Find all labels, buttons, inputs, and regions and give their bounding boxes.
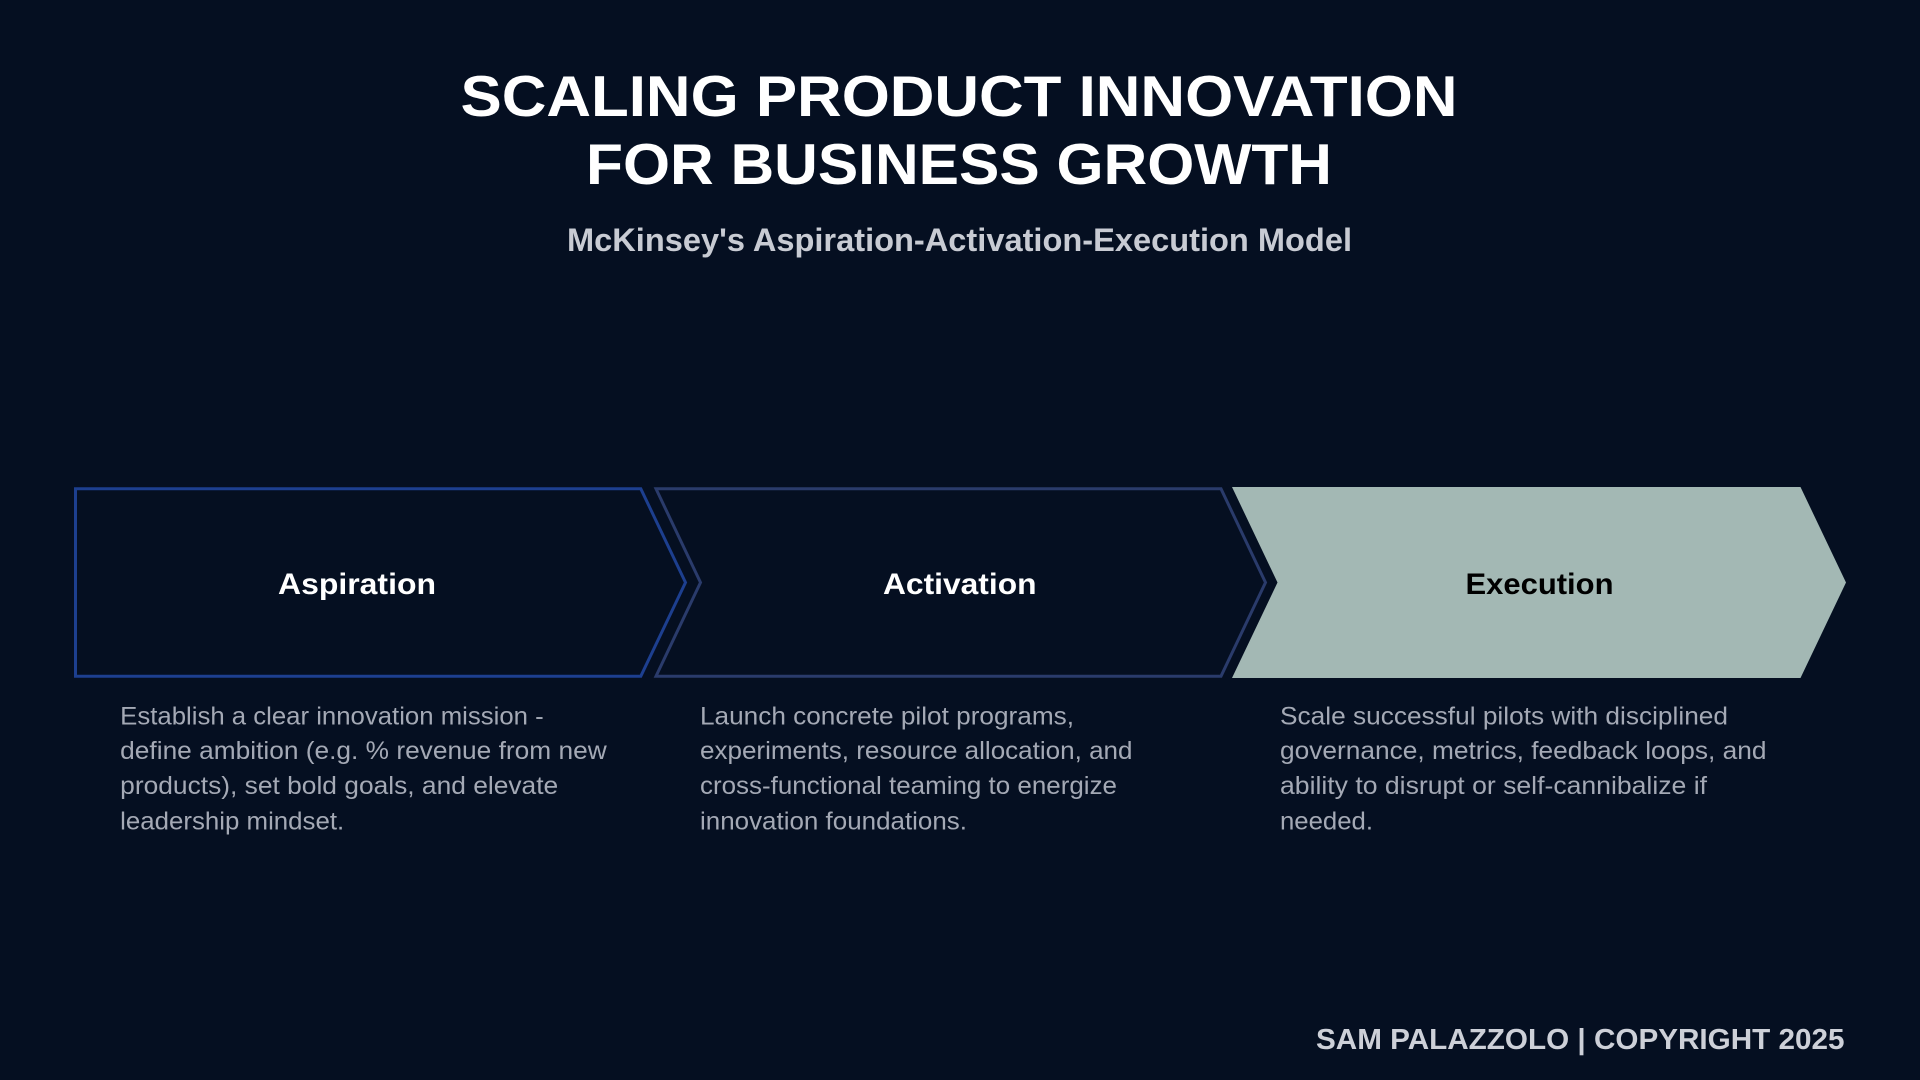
description: aspiration: [120, 702, 608, 836]
description: execution: governance, metrics, feedback loops, and: [1280, 737, 1766, 765]
description: activation: cross-functional teaming to energize: [700, 772, 1117, 800]
label: execution: Execution: [1466, 568, 1614, 601]
description: execution: Scale successful pilots with disciplined: [1280, 702, 1728, 730]
description: execution: [1280, 702, 1766, 836]
description: activation: [700, 702, 1132, 836]
title: SCALING PRODUCT INNOVATION: [460, 65, 1458, 129]
description: aspiration: products), set bold goals, and elevate: [120, 772, 558, 800]
arrow: execution: [1232, 487, 1846, 678]
description: activation: experiments, resource allocation, and: [700, 737, 1132, 765]
description: execution: needed.: [1280, 808, 1373, 836]
title: FOR BUSINESS GROWTH: [586, 133, 1332, 197]
footer: copyright: SAM PALAZZOLO | COPYRIGHT 2025: [1316, 1024, 1844, 1056]
arrow: aspiration: [76, 489, 686, 676]
description: aspiration: Establish a clear innovation mission -: [120, 702, 544, 730]
description: aspiration: define ambition (e.g. % revenue from new: [120, 737, 608, 765]
panel: aspiration: [76, 489, 686, 836]
description: execution: ability to disrupt or self-cannibalize if: [1280, 772, 1707, 800]
title: [460, 65, 1458, 197]
label: aspiration: Aspiration: [278, 568, 436, 601]
description: activation: innovation foundations.: [700, 808, 967, 836]
panel: execution: [1232, 487, 1846, 836]
subtitle: McKinsey's Aspiration-Activation-Execution Model: [567, 222, 1352, 258]
panel: activation: [656, 489, 1266, 836]
arrow: activation: [656, 489, 1266, 676]
description: activation: Launch concrete pilot programs,: [700, 702, 1074, 730]
description: aspiration: leadership mindset.: [120, 808, 344, 836]
label: activation: Activation: [883, 568, 1036, 601]
